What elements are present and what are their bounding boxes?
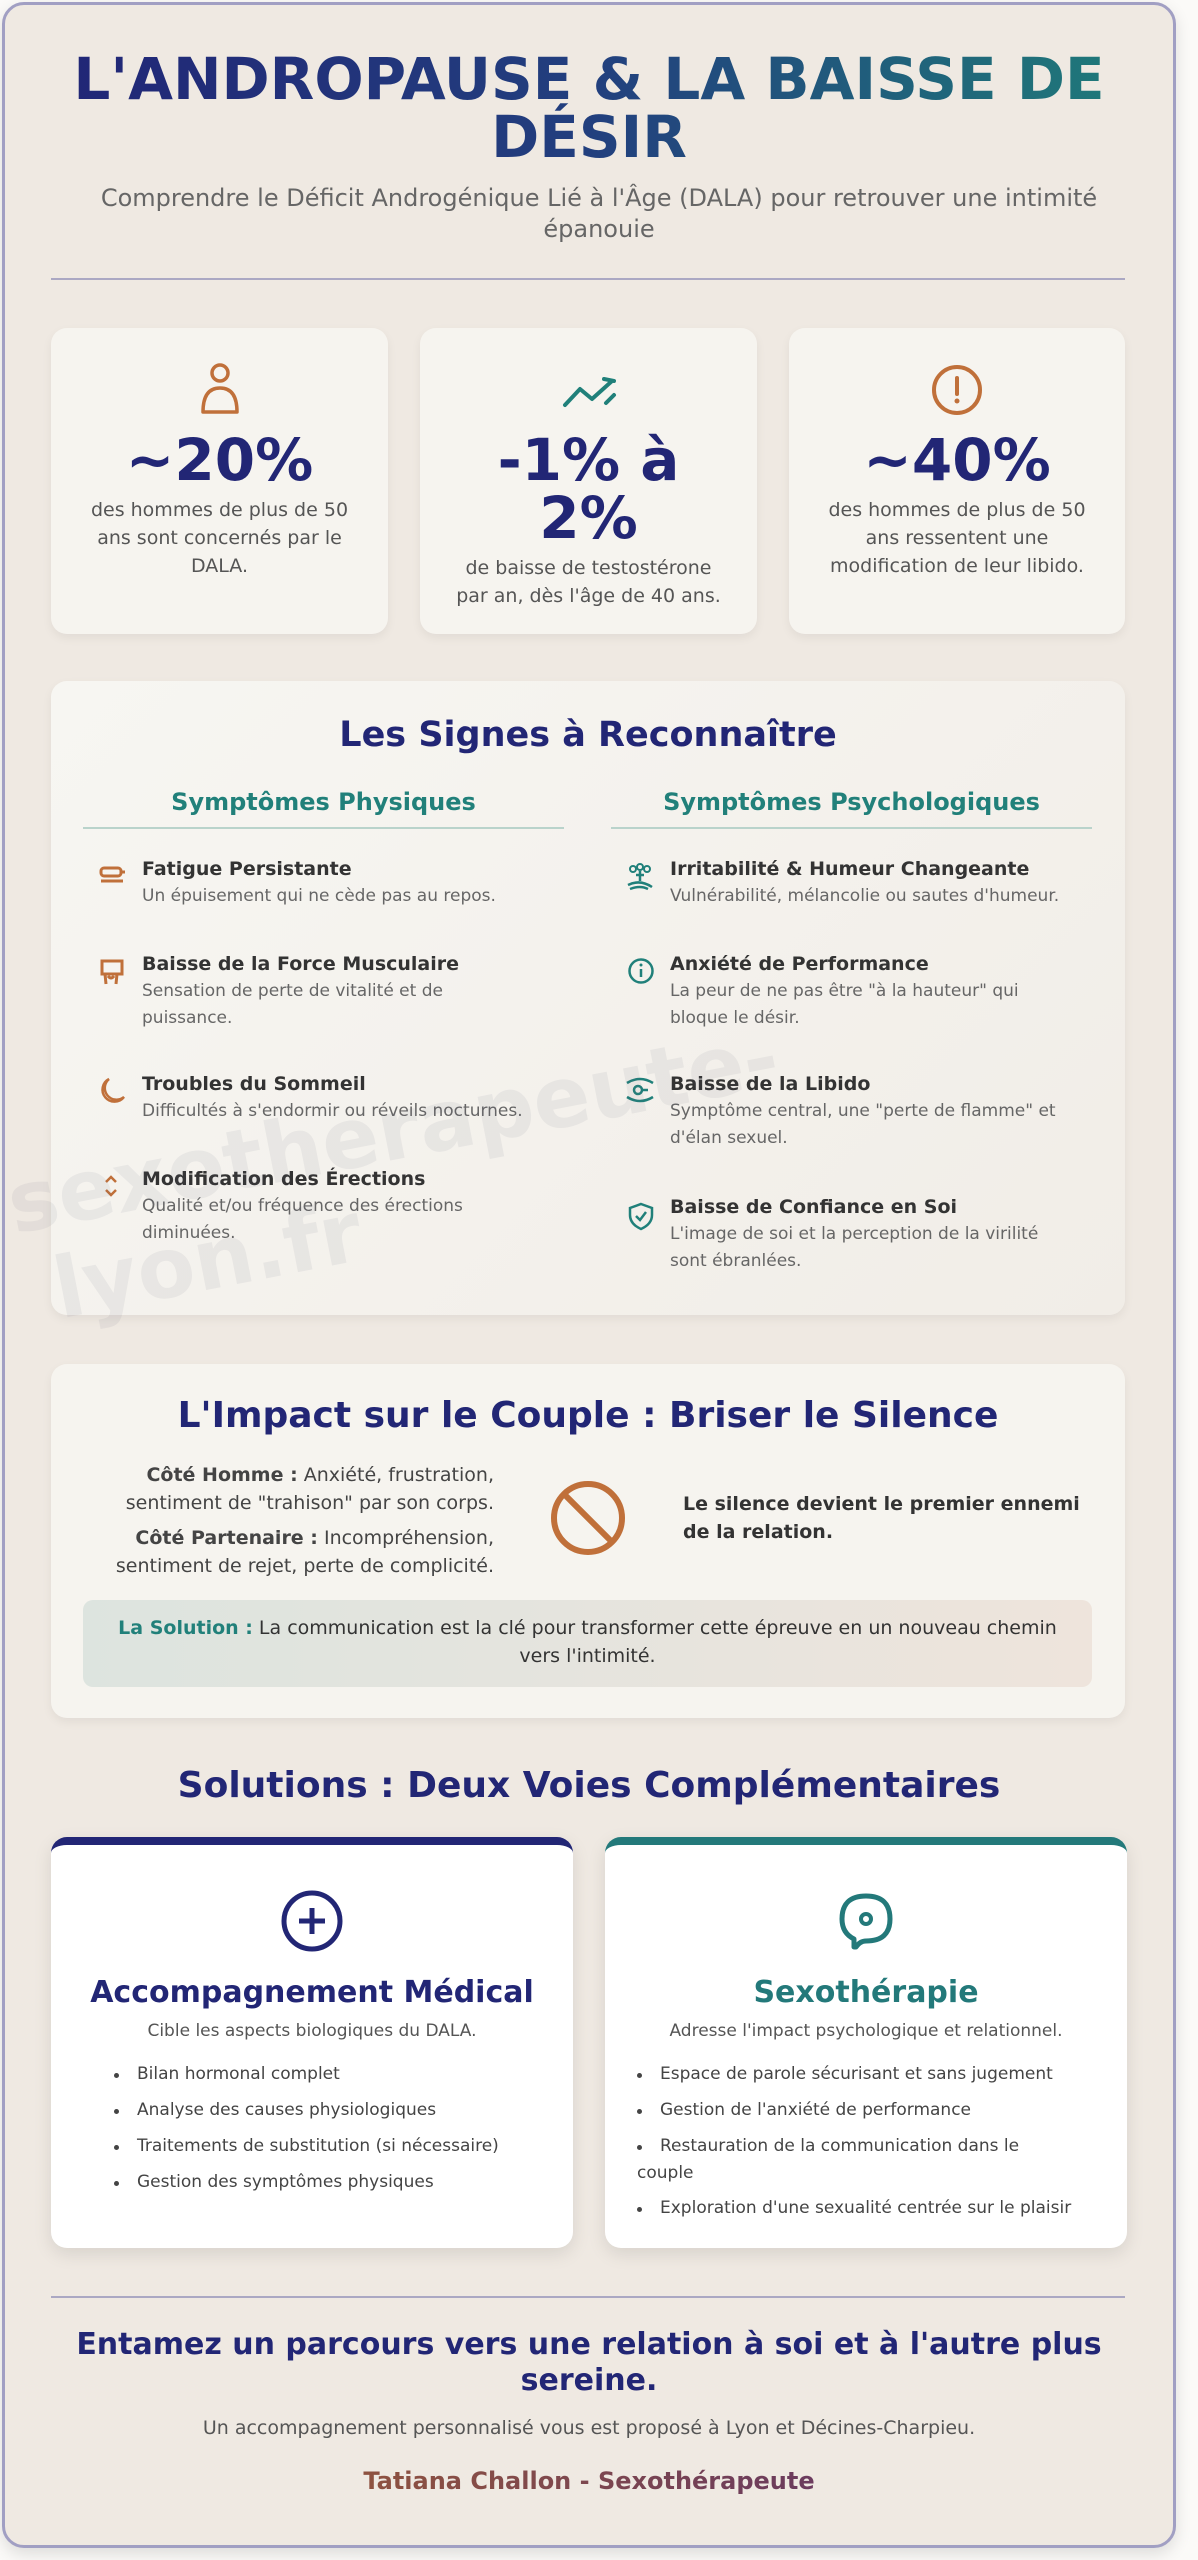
stat number: ~40%: [863, 426, 1051, 494]
icon: forbidden: [551, 1481, 625, 1555]
stat number: ~20%: [126, 426, 313, 494]
stat number: 2%: [539, 484, 638, 552]
item: fatigue: [142, 858, 496, 906]
card: medical: [51, 1837, 573, 2248]
heading: signs: Les Signes à Reconnaître: [339, 715, 837, 755]
stat text: des hommes de plus de 50 ans ressentent une modification de leur libido.: [828, 499, 1086, 577]
item: sleep: Difficultés à s'endormir ou réveils nocturnes.: [142, 1101, 523, 1121]
subheading: psychological: Symptômes Psychologiques: [663, 788, 1040, 816]
card: sexotherapy: [605, 1837, 1127, 2248]
icon: muscle: [100, 960, 124, 984]
subheading: psychological: [611, 787, 1092, 829]
title: L'ANDROPAUSE & LA BAISSE DE DÉSIR: [73, 45, 1105, 171]
icon: trend down: [562, 377, 616, 408]
item: anxiety: [670, 953, 1019, 1028]
list: sexotherapy: Gestion de l'anxiété de performance: [660, 2100, 971, 2120]
stat card 3: [789, 328, 1125, 634]
solution box: [83, 1600, 1092, 1687]
item: confidence: [670, 1196, 1038, 1271]
item: force: puissance.: [142, 1008, 232, 1028]
text: location: Un accompagnement personnalisé vous est proposé à Lyon et Décines-Charpieu.: [203, 2417, 975, 2439]
text: both sides: Côté Homme : Anxiété, frustration, sentiment de "trahison" par son corps.: [126, 1464, 494, 1514]
icon: libido: [626, 1078, 654, 1102]
item: fatigue: Un épuisement qui ne cède pas au repos.: [142, 886, 496, 906]
list: medical: [114, 2064, 499, 2192]
text: medical: Cible les aspects biologiques du DALA.: [147, 2021, 477, 2041]
item: libido: Symptôme central, une "perte de flamme" et d'élan sexuel.: [670, 1101, 1056, 1148]
icon: chevrons: [105, 1175, 117, 1197]
list: medical: Bilan hormonal complet: [137, 2064, 340, 2084]
list: sexotherapy: Restauration de la communication dans le: [660, 2136, 1019, 2156]
list: sexotherapy: couple: [637, 2163, 694, 2183]
subheading: physical: Symptômes Physiques: [171, 788, 476, 816]
icon: moon: [101, 1078, 125, 1103]
list: sexotherapy: Exploration d'une sexualité centrée sur le plaisir: [660, 2198, 1071, 2218]
list: medical: Analyse des causes physiologiques: [137, 2100, 436, 2120]
item: sleep: [142, 1073, 523, 1121]
callout: silence: Le silence devient le premier ennemi de la relation.: [683, 1493, 1080, 1543]
subheading: physical: [83, 787, 564, 829]
icon: battery: [100, 866, 125, 882]
list: medical: Traitements de substitution (si nécessaire): [137, 2136, 499, 2156]
item: confidence: L'image de soi et la perception de la virilité sont ébranlées.: [670, 1224, 1038, 1271]
item: erections: [142, 1168, 463, 1243]
stat number: [498, 426, 679, 552]
item: irritability: [670, 858, 1059, 906]
text: both sides: [116, 1464, 494, 1577]
icon: person: [201, 363, 239, 414]
item: fatigue: Fatigue Persistante: [142, 858, 352, 880]
icon: shield: [628, 1202, 654, 1230]
heading: impact: L'Impact sur le Couple : Briser le Silence: [178, 1395, 998, 1436]
item: libido: [670, 1073, 1056, 1148]
item: erections: Qualité et/ou fréquence des érections diminuées.: [142, 1196, 463, 1243]
solution box: La Solution : La communication est la clé pour transformer cette épreuve en un nouveau chemin vers l'intimité.: [118, 1617, 1057, 1667]
subtitle: Comprendre le Déficit Androgénique Lié à l'Âge (DALA) pour retrouver une intimité épanouie: [101, 184, 1097, 243]
icon: alert: [932, 365, 982, 415]
panel: signs: [51, 681, 1125, 1315]
stat number: -1% à: [498, 426, 679, 494]
icon: info: [628, 958, 654, 984]
item: anxiety: Anxiété de Performance: [670, 953, 929, 975]
watermark: sexotherapeute-: [0, 1008, 787, 1253]
item: anxiety: La peur de ne pas être "à la hauteur" qui bloque le désir.: [670, 981, 1019, 1028]
item: confidence: Baisse de Confiance en Soi: [670, 1196, 957, 1218]
item: sleep: Troubles du Sommeil: [142, 1073, 366, 1095]
call to action: Entamez un parcours vers une relation à soi et à l'autre plus sereine.: [76, 2327, 1102, 2398]
watermark: lyon.fr: [46, 1182, 370, 1338]
list: medical: Gestion des symptômes physiques: [137, 2172, 434, 2192]
list: sexotherapy: Espace de parole sécurisant et sans jugement: [660, 2064, 1053, 2084]
stat text: de baisse de testostérone par an, dès l'âge de 40 ans.: [456, 557, 721, 607]
panel: couple impact: [51, 1364, 1125, 1718]
item: erections: Modification des Érections: [142, 1168, 425, 1190]
text: sexotherapy: Adresse l'impact psychologique et relationnel.: [669, 2021, 1063, 2041]
item: force: Sensation de perte de vitalité et de: [142, 981, 443, 1001]
item: force: [142, 953, 459, 1028]
icon: plus: [282, 1890, 342, 1952]
icon: mood: [628, 863, 653, 890]
list: sexotherapy: [637, 2064, 1072, 2218]
icon: head: [840, 1894, 892, 1950]
signature: Tatiana Challon - Sexothérapeute: [363, 2467, 815, 2495]
title: sexotherapy: Sexothérapie: [753, 1975, 979, 2010]
stat card 1: [51, 328, 388, 634]
title: medical: Accompagnement Médical: [90, 1975, 534, 2010]
stat card 2: [420, 328, 757, 634]
item: irritability: Irritabilité & Humeur Changeante: [670, 858, 1029, 880]
heading: solutions: Solutions : Deux Voies Complémentaires: [178, 1765, 1000, 1806]
item: irritability: Vulnérabilité, mélancolie ou sautes d'humeur.: [670, 886, 1059, 906]
item: libido: Baisse de la Libido: [670, 1073, 870, 1095]
item: force: Baisse de la Force Musculaire: [142, 953, 459, 975]
text: both sides: Côté Partenaire : Incompréhension, sentiment de rejet, perte de complicité.: [116, 1527, 494, 1577]
stat text: des hommes de plus de 50 ans sont concernés par le DALA.: [91, 499, 348, 577]
